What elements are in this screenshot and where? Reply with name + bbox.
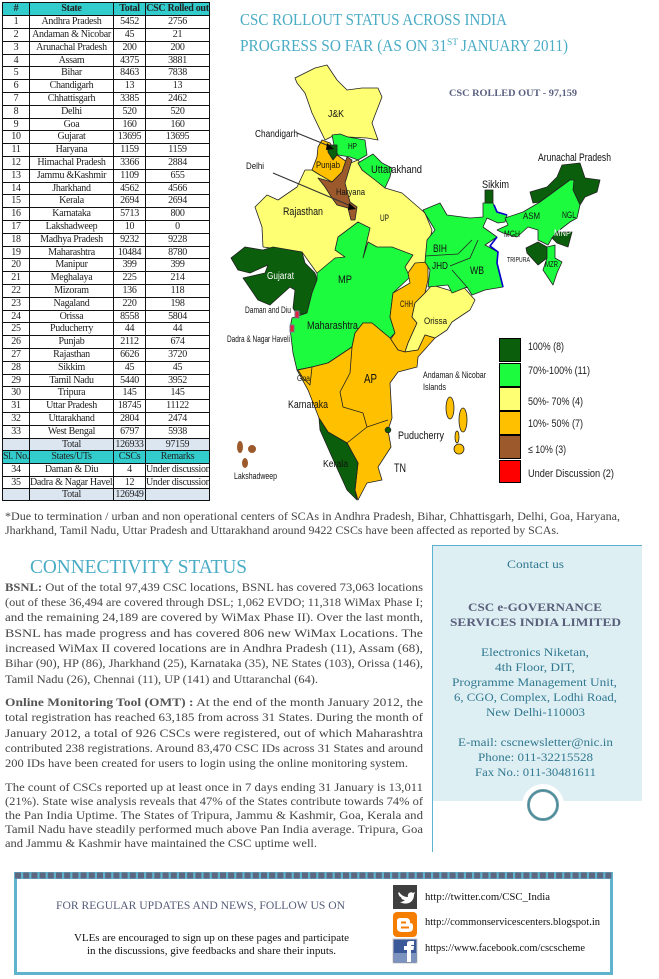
table header row: Total bbox=[119, 3, 140, 14]
text block: BSNL: and the remaining 24,189 are covered by WiMax Phase II). Over the last month, bbox=[5, 612, 423, 624]
map of India bbox=[231, 65, 600, 500]
map labels: Andaman & Nicobar bbox=[423, 370, 486, 380]
map labels: Islands bbox=[423, 382, 446, 392]
table header row: 3952 bbox=[168, 374, 187, 386]
state: Chandigarh bbox=[328, 145, 337, 160]
table header row: 214 bbox=[170, 272, 185, 283]
table header row: 13 bbox=[11, 170, 21, 181]
contact heading: Contact us bbox=[507, 557, 564, 571]
table header row: 27 bbox=[11, 349, 21, 360]
table header row: 399 bbox=[122, 259, 137, 270]
map labels: WB bbox=[470, 265, 484, 277]
footnote: Jharkhand, Tamil Nadu, Uttar Pradesh and Uttarakhand around 9422 CSCs have been affected as reported by SCAs. bbox=[5, 525, 559, 537]
table header row: 4375 bbox=[120, 54, 139, 66]
title: ST bbox=[447, 37, 459, 47]
map labels: Dadra & Nagar Haveli bbox=[227, 334, 290, 344]
contact details: Phone: 011-32215528 bbox=[478, 750, 593, 764]
second table header row: States/UTs bbox=[51, 451, 92, 462]
states: Bihar, Jharkhand, West Bengal bbox=[423, 203, 507, 295]
social links bbox=[425, 892, 600, 954]
map labels: NGL bbox=[562, 210, 576, 220]
state: Tripura bbox=[526, 242, 547, 265]
table header row: 220 bbox=[122, 298, 137, 309]
table header row: 16 bbox=[11, 208, 21, 219]
text block: BSNL: Tamil Nadu (26), Chennai (11), UP (141) and Uttaranchal (64). bbox=[5, 674, 318, 686]
Lakshadweep islands bbox=[237, 441, 256, 468]
table header row: 26 bbox=[11, 336, 21, 347]
table header row: 5804 bbox=[168, 310, 187, 322]
map labels: Sikkim bbox=[482, 179, 509, 191]
legend item: 10%-50% bbox=[500, 412, 583, 434]
table header row: Puducherry bbox=[50, 323, 93, 334]
legend item: up to 10%: ≤ 10% (3) bbox=[528, 444, 566, 456]
panel: contact us bbox=[432, 545, 642, 852]
map labels: Delhi bbox=[246, 161, 264, 171]
table header row: Manipur bbox=[55, 259, 88, 270]
table header row: 4 bbox=[127, 464, 132, 475]
table header row: 5938 bbox=[168, 426, 187, 437]
table header row: 13 bbox=[173, 80, 182, 91]
map labels: Gujarat bbox=[267, 271, 294, 282]
contact details: E-mail: cscnewsletter@nic.in bbox=[458, 735, 613, 749]
table header row: Gujarat bbox=[58, 131, 85, 142]
table header row: Punjab bbox=[58, 336, 84, 347]
legend item: 50%-70% bbox=[500, 388, 583, 410]
text block: BSNL: increased WiMax II covered locations are in Andhra Pradesh (11), Assam (68), bbox=[5, 643, 423, 655]
table header row: 9 bbox=[14, 118, 18, 130]
states: Madhya Pradesh and Maharashtra bbox=[290, 222, 413, 370]
table header row: 45 bbox=[125, 29, 134, 40]
table header row: Lakshadweep bbox=[46, 221, 97, 232]
grand total row: 126949 bbox=[115, 488, 144, 500]
title: CSC ROLLOUT STATUS ACROSS INDIA bbox=[240, 10, 507, 29]
map labels bbox=[227, 109, 611, 481]
text block: BSNL: BSNL: Out of the total 97,439 CSC locations, BSNL has covered 73,063 locations bbox=[5, 582, 424, 594]
state: Manipur bbox=[552, 232, 572, 247]
table header row: 136 bbox=[122, 285, 137, 296]
table header row: Jammu &Kashmir bbox=[37, 170, 106, 181]
table header row: 8780 bbox=[168, 246, 187, 258]
map labels: ASM bbox=[523, 211, 540, 221]
table header row: Nagaland bbox=[54, 298, 89, 309]
table header row: 2462 bbox=[168, 93, 187, 104]
table header row: 35 bbox=[11, 476, 21, 488]
table header row: 19 bbox=[11, 246, 21, 258]
table header row: Meghalaya bbox=[51, 272, 92, 283]
table header row: 31 bbox=[11, 400, 21, 411]
address bbox=[452, 645, 617, 719]
table header row: 12 bbox=[11, 157, 21, 168]
table header row: 2884 bbox=[168, 157, 187, 168]
legend item: 70%-100%: 70%-100% (11) bbox=[528, 365, 590, 377]
table header row: Mizoram bbox=[54, 285, 89, 296]
table header row: 198 bbox=[170, 298, 185, 309]
table header row: 44 bbox=[173, 323, 182, 334]
table header row: 800 bbox=[170, 208, 185, 219]
text block: online monitoring tool: Online Monitoring Tool (OMT) : At the end of the month January 2012, the bbox=[5, 697, 423, 709]
table header row: 145 bbox=[170, 387, 185, 398]
arrow: Chandigarh pointer bbox=[297, 133, 334, 150]
map labels: Haryana bbox=[336, 187, 365, 197]
table header row: 7838 bbox=[168, 67, 187, 78]
table header row: 21 bbox=[173, 29, 182, 40]
map labels: Goa bbox=[297, 374, 310, 383]
second table header row: CSCs bbox=[119, 451, 140, 462]
rolled out total: CSC ROLLED OUT - 97,159 bbox=[449, 88, 578, 98]
table header row: 6 bbox=[14, 80, 18, 91]
title: PROGRESS SO FAR (AS ON 31 bbox=[240, 36, 447, 55]
borders between Bihar, Jharkhand, West Bengal bbox=[425, 240, 478, 287]
total row: Total bbox=[62, 438, 81, 450]
table header row: Maharashtra bbox=[48, 246, 95, 258]
legend item: 100%: 100% (8) bbox=[528, 341, 564, 353]
table header row: 10484 bbox=[118, 246, 141, 258]
table header row: 674 bbox=[170, 336, 185, 347]
table header row: Karnataka bbox=[52, 208, 91, 219]
organisation name bbox=[450, 600, 621, 629]
table header row: 225 bbox=[122, 272, 137, 283]
organisation name: SERVICES INDIA LIMITED bbox=[450, 615, 621, 629]
text block: uptime: the Pan India Uptime. The States of Tripura, Jammu & Kashmir, Goa, Kerala and bbox=[5, 810, 423, 822]
state: Kerala bbox=[319, 418, 358, 500]
table header row: 11122 bbox=[166, 400, 189, 411]
table header row: 2474 bbox=[168, 413, 187, 424]
map labels: Lakshadweep bbox=[234, 471, 277, 481]
table header row: 8558 bbox=[120, 310, 139, 322]
table header row: 200 bbox=[170, 42, 185, 53]
total row: 126933 bbox=[115, 438, 144, 450]
table header row: 2804 bbox=[120, 413, 139, 424]
table header row: 2694 bbox=[168, 195, 187, 206]
map labels: Puducherry bbox=[398, 430, 444, 442]
map labels: Kerala bbox=[323, 459, 348, 470]
text block: uptime: Tamil Nadu have steadily performed much above Pan India average. Tripura, Goa bbox=[5, 824, 423, 836]
table header row: Haryana bbox=[56, 144, 87, 155]
legend item: 10%-50%: 10%- 50% (7) bbox=[528, 418, 583, 430]
table header row: 14 bbox=[11, 182, 21, 194]
table header row: 10 bbox=[125, 221, 134, 232]
text block: uptime: and Jammu & Kashmir have maintained the CSC uptime well. bbox=[5, 838, 317, 850]
text block: uptime bbox=[5, 782, 423, 850]
table header row: 3366 bbox=[120, 157, 139, 168]
address: 4th Floor, DIT, bbox=[495, 660, 575, 674]
table header row: 520 bbox=[122, 106, 137, 117]
table header row: 399 bbox=[170, 259, 185, 270]
table header row: 5 bbox=[14, 67, 18, 78]
table header row: 45 bbox=[125, 362, 134, 373]
text block: BSNL: BSNL has made progress and has covered 806 new WiMax Locations. The bbox=[5, 628, 423, 640]
table header row: 160 bbox=[170, 118, 185, 130]
states: Andhra Pradesh, Karnataka, Tamil Nadu bbox=[297, 323, 435, 500]
table header row: 25 bbox=[11, 323, 21, 334]
table header row: Assam bbox=[59, 54, 84, 66]
panel: social media follow box bbox=[14, 872, 613, 974]
text block: BSNL bbox=[5, 582, 424, 686]
grand total row: Total bbox=[62, 488, 81, 500]
state: Chhattisgarh bbox=[390, 262, 428, 352]
text block: uptime: The count of CSCs reported up at least once in 7 days ending 31 January is 13,011 bbox=[5, 782, 423, 794]
table header row: 3385 bbox=[120, 93, 139, 104]
legend item: up to 10% bbox=[500, 436, 566, 458]
table header row: 6797 bbox=[120, 426, 139, 437]
table header row: 30 bbox=[11, 387, 21, 398]
total row: 97159 bbox=[166, 438, 189, 450]
table header row: Bihar bbox=[61, 67, 82, 78]
table header row: Madhya Pradesh bbox=[40, 234, 103, 245]
organisation name: CSC e-GOVERNANCE bbox=[468, 600, 602, 614]
map labels: CHH bbox=[400, 299, 413, 309]
state: Jammu and Kashmir bbox=[295, 65, 382, 140]
table header row: Tripura bbox=[58, 387, 85, 398]
table header row: 7 bbox=[14, 93, 18, 104]
table header row: Goa bbox=[64, 118, 79, 130]
table: state-wise CSC rollout bbox=[2, 2, 210, 501]
map labels: TN bbox=[394, 461, 406, 475]
table header row: Sikkim bbox=[58, 362, 85, 373]
text block: online monitoring tool: total registration has reached 63,185 from across 31 States. During the month of bbox=[5, 712, 423, 724]
legend item: under discussion bbox=[500, 460, 614, 482]
map labels: MNP bbox=[554, 228, 571, 238]
table header row: 9232 bbox=[120, 234, 139, 245]
contact details bbox=[458, 735, 613, 779]
map labels: Chandigarh bbox=[255, 129, 298, 140]
table header row: 6626 bbox=[120, 349, 139, 360]
second table header row: Sl. No. bbox=[3, 451, 29, 462]
map labels: JHD bbox=[432, 261, 448, 272]
table header row: Chhattisgarh bbox=[48, 93, 95, 104]
table header row: 34 bbox=[11, 464, 21, 475]
table header row: 145 bbox=[122, 387, 137, 398]
Puducherry marker bbox=[385, 427, 391, 433]
legend item: 50%-70%: 50%- 70% (4) bbox=[528, 396, 583, 408]
encouragement text: VLEs are encouraged to sign up on these pages and participate bbox=[74, 932, 349, 944]
map labels: Orissa bbox=[424, 316, 447, 326]
Andaman and Nicobar islands bbox=[446, 397, 467, 454]
table header row: State bbox=[61, 3, 82, 14]
table header row: Tamil Nadu bbox=[49, 374, 94, 386]
map labels: UP bbox=[380, 213, 389, 223]
legend bbox=[500, 338, 614, 482]
table header row: 18745 bbox=[118, 400, 141, 411]
total row bbox=[3, 438, 209, 450]
title bbox=[240, 10, 568, 55]
table header row: 2694 bbox=[120, 195, 139, 206]
table header row: 45 bbox=[173, 362, 182, 373]
legend item: 100% bbox=[500, 338, 564, 362]
table header row bbox=[3, 3, 210, 500]
state: Goa bbox=[298, 367, 312, 385]
map labels: HP bbox=[348, 142, 357, 151]
encouragement text: in the discussions, give feedbacks and share their inputs. bbox=[87, 945, 336, 957]
table header row: 15 bbox=[11, 195, 21, 206]
legend item: under discussion: Under Discussion (2) bbox=[528, 468, 614, 480]
state: Haryana and Delhi bbox=[318, 157, 357, 220]
table header row: 0 bbox=[175, 221, 180, 232]
table header row: Uttar Pradesh bbox=[46, 400, 97, 411]
table header row: Andhra Pradesh bbox=[42, 16, 101, 27]
table header row: 1159 bbox=[120, 144, 139, 155]
table header row: 23 bbox=[11, 298, 21, 309]
table header row: 29 bbox=[11, 374, 21, 386]
table header row: 22 bbox=[11, 285, 21, 296]
map labels: AP bbox=[364, 371, 377, 386]
table header row: 3881 bbox=[168, 54, 187, 66]
text block: online monitoring tool: 200 IDs have been created for users to login using the online monitoring system. bbox=[5, 758, 408, 770]
state: Arunachal Pradesh bbox=[530, 163, 600, 205]
table header row: Jharkhand bbox=[52, 182, 91, 194]
table header row: 5713 bbox=[120, 208, 139, 219]
table header row: 13695 bbox=[166, 131, 189, 142]
table header row: 118 bbox=[171, 285, 184, 296]
table header row: 2 bbox=[14, 29, 18, 40]
dashed top strip bbox=[14, 872, 613, 879]
state: Sikkim bbox=[485, 190, 493, 203]
table header row: 200 bbox=[122, 42, 137, 53]
second table header row bbox=[3, 451, 209, 463]
state: Orissa bbox=[405, 283, 475, 352]
table header row: 655 bbox=[170, 170, 185, 181]
table header row: 13 bbox=[125, 80, 134, 91]
table header row: Kerala bbox=[59, 195, 84, 206]
table header row: 12 bbox=[125, 476, 134, 488]
heading: connectivity status: CONNECTIVITY STATUS bbox=[30, 557, 247, 578]
table header row: Delhi bbox=[61, 106, 82, 117]
Dadra and Nagar Haveli marker bbox=[290, 325, 294, 332]
table header row: Uttarakhand bbox=[48, 413, 95, 424]
map labels: Punjab bbox=[316, 160, 340, 170]
table header row: 11 bbox=[11, 144, 21, 155]
table header row: 24 bbox=[11, 310, 21, 322]
table header row: # bbox=[14, 3, 18, 14]
text block: uptime: (21%). State wise analysis reveals that 47% of the States contribute towards 74% of bbox=[5, 796, 423, 808]
follow heading: FOR REGULAR UPDATES AND NEWS, FOLLOW US ON bbox=[56, 900, 346, 912]
social links: http://twitter.com/CSC_India bbox=[425, 892, 551, 903]
state borders in the south bbox=[340, 347, 388, 443]
table header row: Himachal Pradesh bbox=[37, 157, 106, 168]
table header row: 5452 bbox=[120, 16, 139, 27]
Daman and Diu marker bbox=[295, 311, 299, 318]
states: Assam, Meghalaya, Nagaland bbox=[497, 180, 580, 245]
table header row: 18 bbox=[11, 234, 21, 245]
table header row: 1 bbox=[14, 16, 18, 27]
state: Mizoram bbox=[543, 245, 562, 285]
table header row: Arunachal Pradesh bbox=[36, 42, 107, 53]
table header row: Under discussion bbox=[146, 464, 210, 475]
second table header row: Remarks bbox=[161, 451, 194, 462]
address: New Delhi-110003 bbox=[486, 705, 585, 719]
table header row: 8 bbox=[14, 106, 18, 117]
table header row: 8463 bbox=[120, 67, 139, 78]
footnote bbox=[5, 511, 620, 537]
table header row: 5440 bbox=[120, 374, 139, 386]
icon: twitter bbox=[393, 885, 417, 909]
table header row: 10 bbox=[11, 131, 21, 142]
table header row: 32 bbox=[11, 413, 21, 424]
social links: http://commonservicescenters.blogspot.in bbox=[425, 917, 600, 928]
table header row: 3720 bbox=[168, 349, 187, 360]
table header row: 520 bbox=[170, 106, 185, 117]
social links: https://www.facebook.com/cscscheme bbox=[425, 943, 586, 954]
legend item: 70%-100% bbox=[500, 364, 590, 386]
table header row: 1159 bbox=[168, 144, 187, 155]
icon: facebook bbox=[393, 939, 417, 963]
address: 6, CGO, Complex, Lodhi Road, bbox=[454, 690, 617, 704]
grand total row bbox=[3, 488, 209, 500]
table header row: 28 bbox=[11, 362, 21, 373]
table header row: West Bengal bbox=[48, 426, 95, 437]
table header row: 17 bbox=[11, 221, 21, 232]
table header row: 21 bbox=[11, 272, 21, 283]
text block: online monitoring tool: January 2012, a total of 926 CSCs were registered, out of which Maharashtra bbox=[5, 728, 423, 740]
map labels: Daman and Diu bbox=[245, 305, 291, 315]
map labels: Karnataka bbox=[288, 399, 329, 411]
text block: BSNL: Bihar (90), HP (86), Jharkhand (25), Karnataka (35), NE States (103), Orissa (146), bbox=[5, 658, 423, 670]
title: JANUARY 2011) bbox=[461, 36, 568, 55]
table header row: CSC Rolled out bbox=[146, 3, 209, 14]
icon: blogger bbox=[393, 912, 417, 937]
table header row: 9228 bbox=[168, 234, 187, 245]
table header row: 1109 bbox=[120, 170, 139, 181]
state: Himachal Pradesh bbox=[332, 134, 367, 160]
map labels: TRIPURA bbox=[507, 257, 530, 264]
table header row: Orissa bbox=[60, 310, 83, 322]
table header row: 2756 bbox=[168, 16, 187, 27]
table header row: Rajasthan bbox=[53, 349, 90, 360]
table header row: 20 bbox=[11, 259, 21, 270]
table header row: 4562 bbox=[120, 182, 139, 194]
table header row: Chandigarh bbox=[50, 80, 93, 91]
text block: BSNL: (out of these 36,494 are covered through DSL; 1,062 EVDO; 11,318 WiMax Phase I; bbox=[5, 597, 423, 609]
map labels: Uttarakhand bbox=[371, 164, 422, 176]
table header row: Dadra & Nagar Haveli bbox=[30, 476, 114, 488]
table header row: Andaman & Nicobar bbox=[32, 29, 111, 40]
footnote: *Due to termination / urban and non operational centers of SCAs in Andhra Pradesh, Bihar, Chhattisgarh, Delhi, Goa, Haryana, bbox=[5, 511, 620, 523]
map labels: J&K bbox=[328, 109, 344, 120]
map labels: MGH bbox=[504, 229, 520, 239]
table header row: 3 bbox=[14, 42, 18, 53]
address: Electronics Niketan, bbox=[481, 645, 589, 659]
contact details: Fax No.: 011-30481611 bbox=[475, 765, 596, 779]
state: Punjab bbox=[312, 140, 347, 182]
address: Programme Management Unit, bbox=[452, 675, 617, 689]
table header row: 4566 bbox=[168, 182, 187, 194]
map labels: BIH bbox=[433, 243, 447, 255]
map labels: MZR bbox=[545, 260, 558, 269]
states: Rajasthan and Uttar Pradesh bbox=[255, 160, 432, 300]
table header row: Under discussion bbox=[146, 476, 210, 488]
map labels: Maharashtra bbox=[307, 320, 359, 332]
map labels: Arunachal Pradesh bbox=[538, 152, 611, 164]
text block: online monitoring tool: contributed 238 registrations. Around 83,470 CSC IDs across 31 States and around bbox=[5, 743, 423, 755]
state: Gujarat bbox=[231, 247, 317, 315]
table header row: 160 bbox=[122, 118, 137, 130]
table header row: 2112 bbox=[120, 336, 139, 347]
table header row: 13695 bbox=[118, 131, 141, 142]
state: Uttarakhand bbox=[358, 154, 392, 188]
table header row: Daman & Diu bbox=[45, 464, 98, 475]
text block: online monitoring tool bbox=[5, 697, 423, 770]
map labels: Rajasthan bbox=[283, 206, 323, 218]
encouragement text bbox=[74, 932, 349, 957]
ring ornament bbox=[522, 784, 564, 826]
international border accent bbox=[490, 205, 507, 287]
table header row: 33 bbox=[11, 426, 21, 437]
table header row: 4 bbox=[14, 54, 18, 66]
map labels: MP bbox=[338, 274, 352, 286]
arrow: Delhi pointer bbox=[273, 173, 356, 210]
table header row: 44 bbox=[125, 323, 134, 334]
